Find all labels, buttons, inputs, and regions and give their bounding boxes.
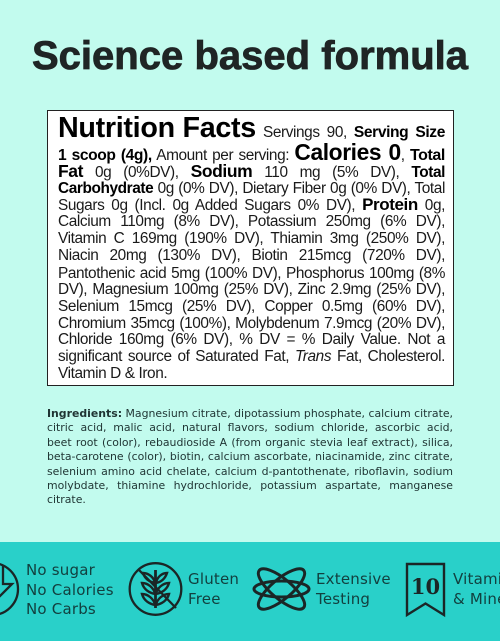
text: vitamins and minerals (453, 570, 500, 608)
nutrition facts heading line (58, 112, 445, 144)
icon: extensive testing (252, 567, 310, 611)
nutrition facts heading line: Servings 90, Serving Size (263, 124, 445, 141)
ingredients text: citrate. (47, 493, 86, 506)
panel: nutrition facts: Niacin 20mg (130% DV), Biotin 215mcg (720% DV), (58, 247, 445, 264)
panel: nutrition facts (47, 110, 454, 386)
icon: gluten free (128, 562, 182, 616)
text: gluten free (188, 570, 239, 608)
panel: nutrition facts: Chromium 35mcg (100%), Molybdenum 7.9mcg (20% DV), (58, 314, 445, 332)
text: no sugar (26, 561, 114, 618)
text: no sugar: No Calories (26, 581, 114, 599)
panel: nutrition facts: Chloride 160mg (6% DV), % DV = % Daily Value. Not a (58, 331, 445, 348)
panel: nutrition facts: DV), Magnesium 100mg (25% DV), Zinc 2.9mg (25% DV), (58, 281, 445, 298)
icon: no sugar (0, 563, 20, 615)
text: extensive testing: Extensive (316, 570, 391, 588)
panel: nutrition facts: Vitamin D & Iron. (58, 365, 167, 382)
icon: 10 vitamins badge: 10 (411, 574, 440, 599)
serving line: 1 scoop (4g), Amount per serving: Calories 0, Total (58, 138, 445, 164)
text: extensive testing: Testing (316, 590, 370, 608)
benefits band (0, 542, 500, 641)
panel: nutrition facts: significant source of Saturated Fat, Trans Fat, Cholesterol. (58, 348, 445, 365)
ingredients text: molybdate, thiamine hydrochloride, potassium aspartate, manganese (47, 479, 453, 492)
nutrition facts heading line: Nutrition Facts (58, 112, 256, 144)
ingredients text: citric acid, malic acid, natural flavors, sodium chloride, ascorbic acid, (47, 421, 453, 434)
title: Science based formula (32, 34, 468, 78)
panel: nutrition facts: Pantothenic acid 5mg (100% DV), Phosphorus 100mg (8% (58, 264, 445, 282)
panel: nutrition facts: Calcium 110mg (8% DV), Potassium 250mg (6% DV), (58, 213, 445, 230)
ingredients text (47, 407, 453, 506)
panel: nutrition facts: Selenium 15mcg (25% DV), Copper 0.5mg (60% DV), (58, 298, 445, 315)
ingredients text: beta-carotene (color), biotin, calcium ascorbate, niacinamide, zinc citrate, (47, 450, 453, 463)
ingredients text: Ingredients: Magnesium citrate, dipotassium phosphate, calcium citrate, (47, 407, 453, 420)
panel: nutrition facts: Vitamin C 169mg (190% DV), Thiamin 3mg (250% DV), (58, 230, 445, 247)
nutrient lines: Fat 0g (0%DV), Sodium 110 mg (5% DV), Total (58, 161, 445, 181)
panel: nutrition facts: Sugars 0g (Incl. 0g Added Sugars 0% DV), Protein 0g, (58, 195, 445, 214)
panel: nutrition facts: Carbohydrate 0g (0% DV), Dietary Fiber 0g (0% DV), Total (58, 180, 445, 196)
text: gluten free: Free (188, 590, 221, 608)
text: gluten free: Gluten (188, 570, 239, 588)
text: no sugar: No Carbs (26, 600, 96, 618)
text: extensive testing (316, 570, 391, 608)
icon: 10 vitamins badge (406, 562, 446, 618)
ingredients text: beet root (color), rebaudioside A (from organic stevia leaf extract), silica, (47, 436, 453, 449)
ingredients text: selenium amino acid chelate, calcium d-pantothenate, riboflavin, sodium (47, 465, 453, 478)
text: no sugar: No sugar (26, 561, 95, 579)
